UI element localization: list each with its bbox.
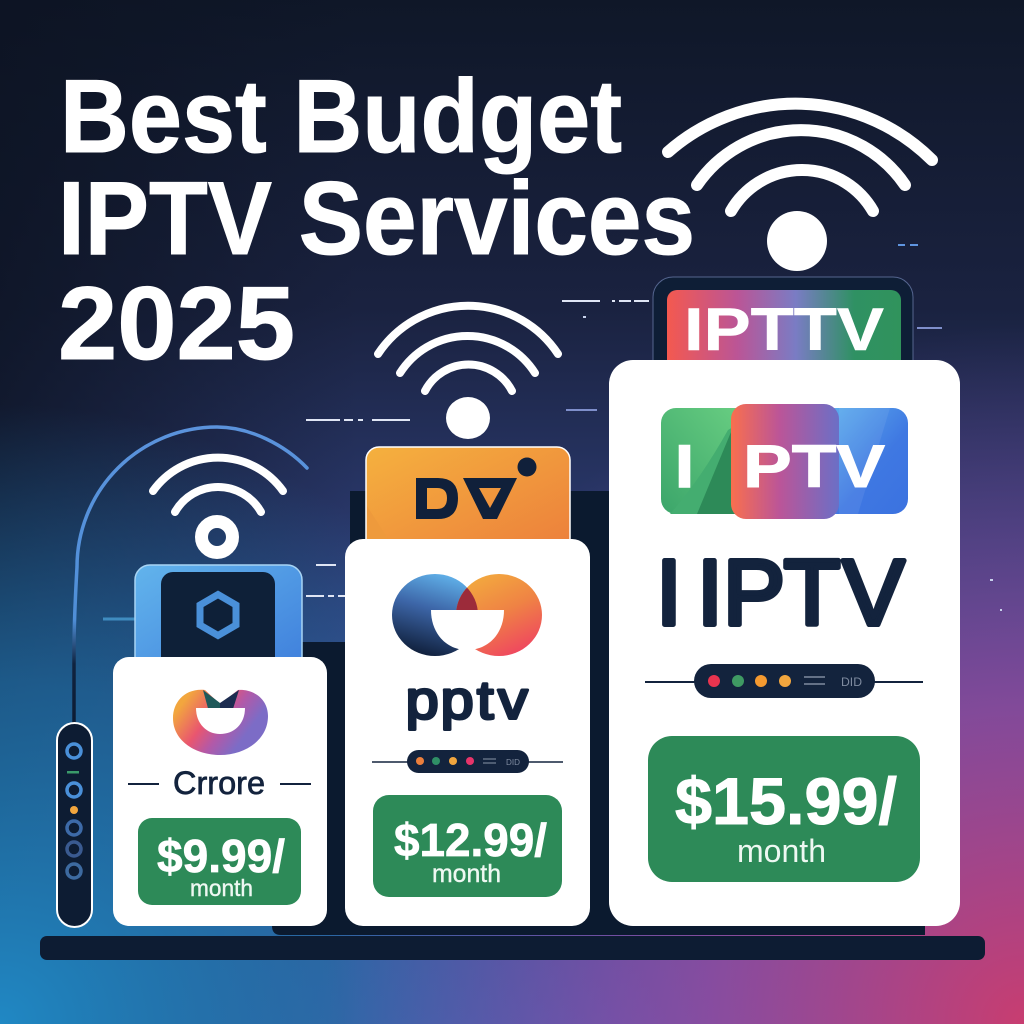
card: PPTV $12.99 [345,539,590,926]
set-top box strip [645,664,923,698]
title: 2025 [58,266,295,382]
icon: Crrore logo [173,690,268,755]
large wifi icon [668,104,932,271]
icon: PPTV overlapping circles logo [392,574,542,656]
icon: IPTV tiles logo [661,404,908,519]
price badge $12.99: month [432,860,501,888]
large TV screen [653,277,913,370]
price badge $9.99: month [190,875,253,901]
set-top box strip: DID [841,675,862,689]
price badge $15.99 [648,736,920,882]
icon: IPTV tiles logo: I [675,433,694,500]
dark backing panel [272,491,925,935]
brand name Crrore: Crrore [173,765,265,801]
title: IPTV Services [58,161,695,277]
blue device screen [135,565,302,670]
price badge $12.99 [373,795,562,897]
price badge $9.99 [138,818,301,905]
small wifi icon [153,458,283,552]
set-top box strip [372,750,563,773]
brand name pptv: pptv [406,671,528,731]
title: Best Budget [60,59,622,175]
title [58,59,695,382]
base shelf [40,936,985,960]
card: Crrore $9.99 [113,657,327,926]
orange device screen [366,447,570,550]
price badge $12.99: $12.99/ [394,814,547,866]
brand name I IPTV: IIPTV [656,540,905,644]
icon: IPTV tiles logo: PTV [743,433,885,500]
price badge $15.99: month [737,833,826,869]
router with cable [57,427,307,927]
card: IPTV $15.99 [609,360,960,926]
medium wifi icon [378,306,558,439]
large TV screen: IPTTV [684,296,884,363]
price badge $15.99: $15.99/ [675,764,897,838]
set-top box strip: DID [506,758,520,767]
price badge $9.99: $9.99/ [157,830,285,882]
